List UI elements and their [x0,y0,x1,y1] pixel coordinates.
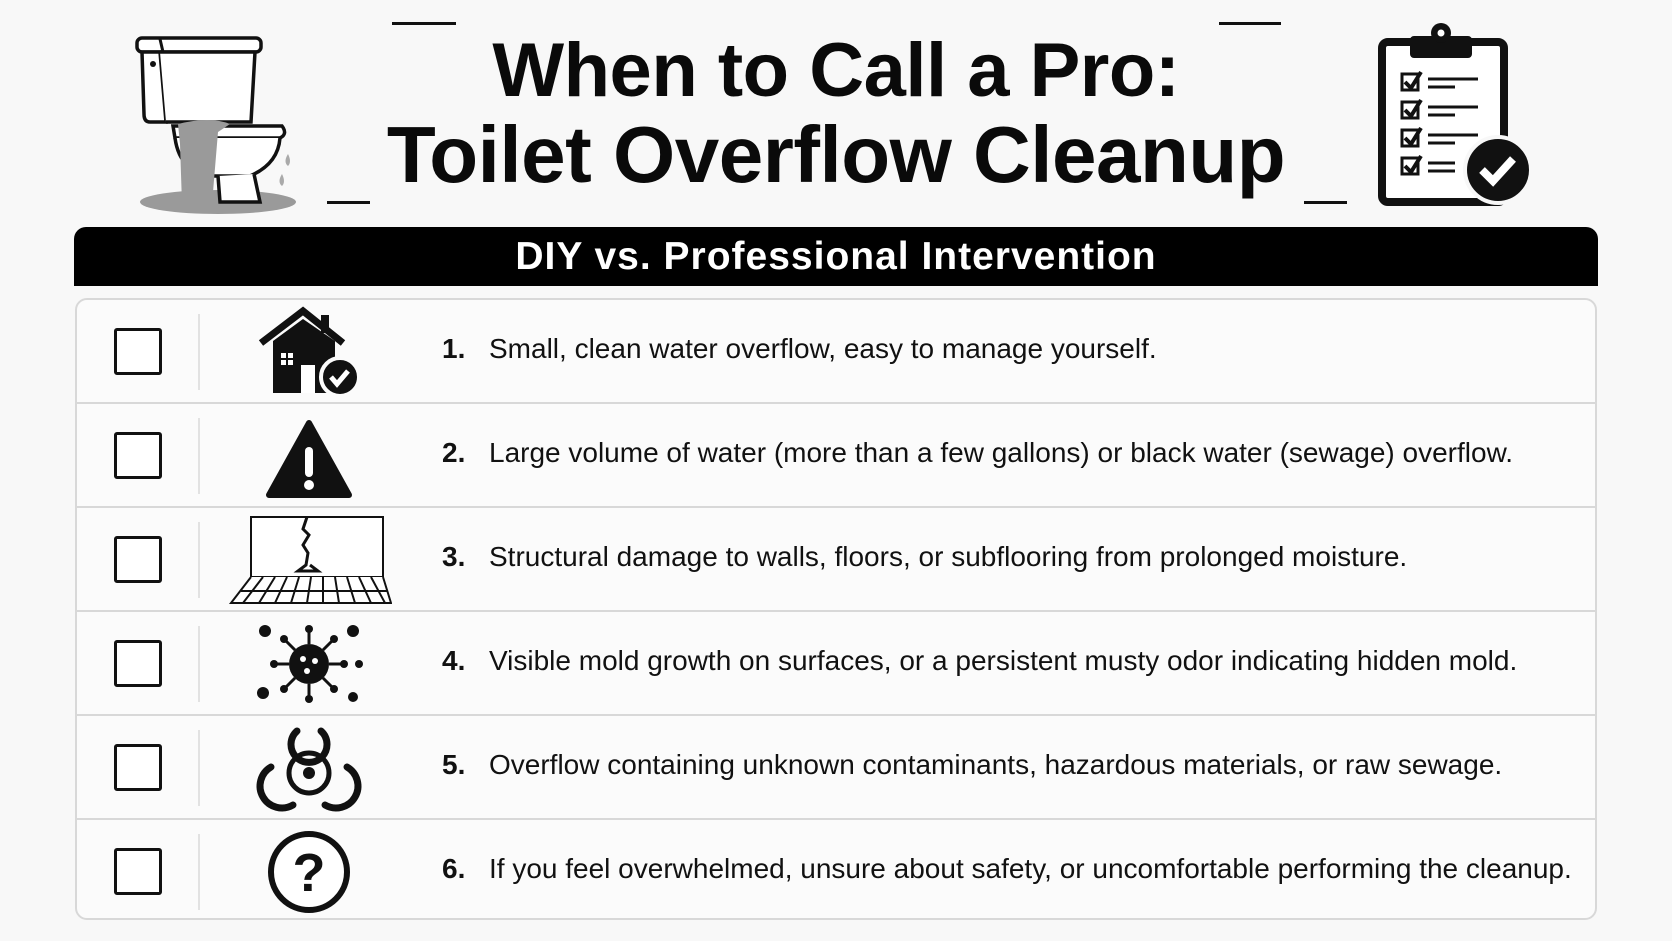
row 6 [114,831,1572,913]
text 3: Structural damage to walls, floors, or subflooring from prolonged moisture. [489,541,1407,572]
text 2: 2. [442,437,465,468]
icon: question mark [268,831,350,913]
text 3: 3. [442,541,465,572]
row 4 [77,612,1595,716]
icon: question mark: ? [292,843,326,903]
icon: mold spores [257,625,363,703]
icon: overflowing toilet [135,36,296,214]
row 2 [77,404,1595,508]
text 4: Visible mold growth on surfaces, or a persistent musty odor indicating hidden mold. [489,645,1517,676]
text 1: 1. [442,333,465,364]
decorative title dashes [327,22,1347,204]
row 5 [77,716,1595,820]
icon: cracked wall and floor [229,516,392,604]
title [387,28,1285,199]
row 1 [77,300,1595,404]
text 1: Small, clean water overflow, easy to manage yourself. [489,333,1157,364]
icon: clipboard checklist [1378,23,1529,206]
panel: checklist [75,298,1597,920]
header bar: DIY vs. Professional Intervention [515,235,1157,278]
text 6: 6. [442,853,465,884]
text 5: Overflow containing unknown contaminants, hazardous materials, or raw sewage. [489,749,1502,780]
text 4: 4. [442,645,465,676]
header bar [74,227,1598,286]
text 5: 5. [442,749,465,780]
text 2: Large volume of water (more than a few gallons) or black water (sewage) overflow. [489,437,1513,468]
row 3 [77,508,1595,612]
icon: biohazard [256,728,362,812]
text 6: If you feel overwhelmed, unsure about safety, or uncomfortable performing the cleanup. [489,853,1572,884]
icon: house check [258,306,357,394]
title: When to Call a Pro: [492,28,1180,113]
icon: warning [266,420,352,498]
title: Toilet Overflow Cleanup [387,110,1285,199]
